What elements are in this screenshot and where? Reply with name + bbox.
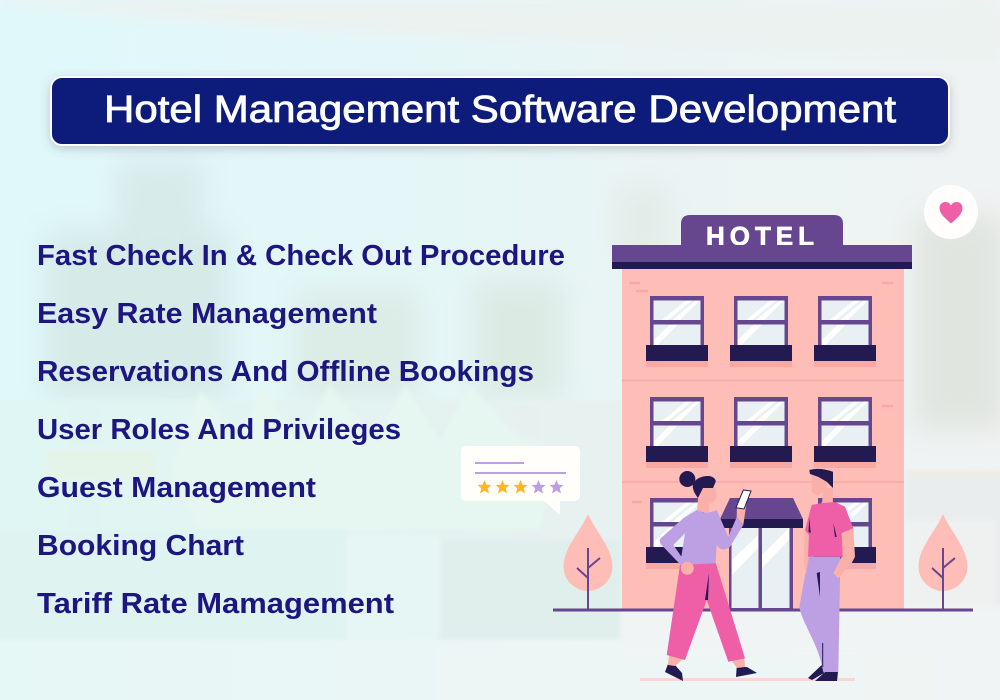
- ankles: [668, 655, 745, 668]
- pants: [667, 563, 745, 662]
- hotel sign: [681, 215, 843, 251]
- feature list: [37, 240, 565, 620]
- sweater: [660, 510, 743, 566]
- tree: right: [918, 514, 968, 610]
- stars: [478, 480, 564, 494]
- shirt: [805, 502, 853, 557]
- hair: [693, 476, 716, 498]
- right wall, bench, box: [905, 470, 1000, 605]
- neck: [697, 498, 709, 512]
- phone: [736, 490, 751, 509]
- item 3: Reservations And Offline Bookings: [37, 356, 534, 388]
- ceiling: [0, 0, 1000, 60]
- item 7: Tariff Rate Mamagement: [37, 588, 394, 620]
- floor: [0, 640, 1000, 700]
- face: [700, 484, 716, 504]
- hotel sign: HOTEL: [706, 221, 814, 251]
- windows: [646, 296, 876, 569]
- pants: [799, 557, 840, 672]
- shoes: [665, 664, 757, 681]
- hair: [809, 469, 833, 488]
- person: woman with phone: [660, 471, 757, 681]
- icon: heart badge: [924, 185, 978, 239]
- lower wall and sofa: [0, 385, 622, 650]
- arms: [804, 530, 809, 574]
- neck: [822, 488, 833, 505]
- item 6: Booking Chart: [37, 530, 244, 562]
- hands: [681, 562, 694, 575]
- shoes: [808, 665, 838, 681]
- entrance door: [720, 498, 803, 610]
- ground line: [553, 608, 973, 612]
- face: [812, 475, 827, 496]
- hotel building: [612, 215, 912, 610]
- roof: [612, 245, 912, 269]
- title: Hotel Management Software Development: [104, 89, 896, 131]
- person: man: [799, 469, 855, 681]
- item 5: Guest Management: [37, 472, 316, 504]
- item 4: User Roles And Privileges: [37, 414, 401, 446]
- title banner: [51, 77, 949, 145]
- building body: [622, 268, 904, 610]
- ground shadow: [640, 678, 855, 681]
- right side trees: [915, 215, 1000, 430]
- column and garden patches: [115, 160, 205, 280]
- item 1: Fast Check In & Check Out Procedure: [37, 240, 565, 272]
- rating speech bubble: [461, 446, 580, 515]
- item 2: Easy Rate Management: [37, 298, 377, 330]
- tree: left: [564, 514, 612, 610]
